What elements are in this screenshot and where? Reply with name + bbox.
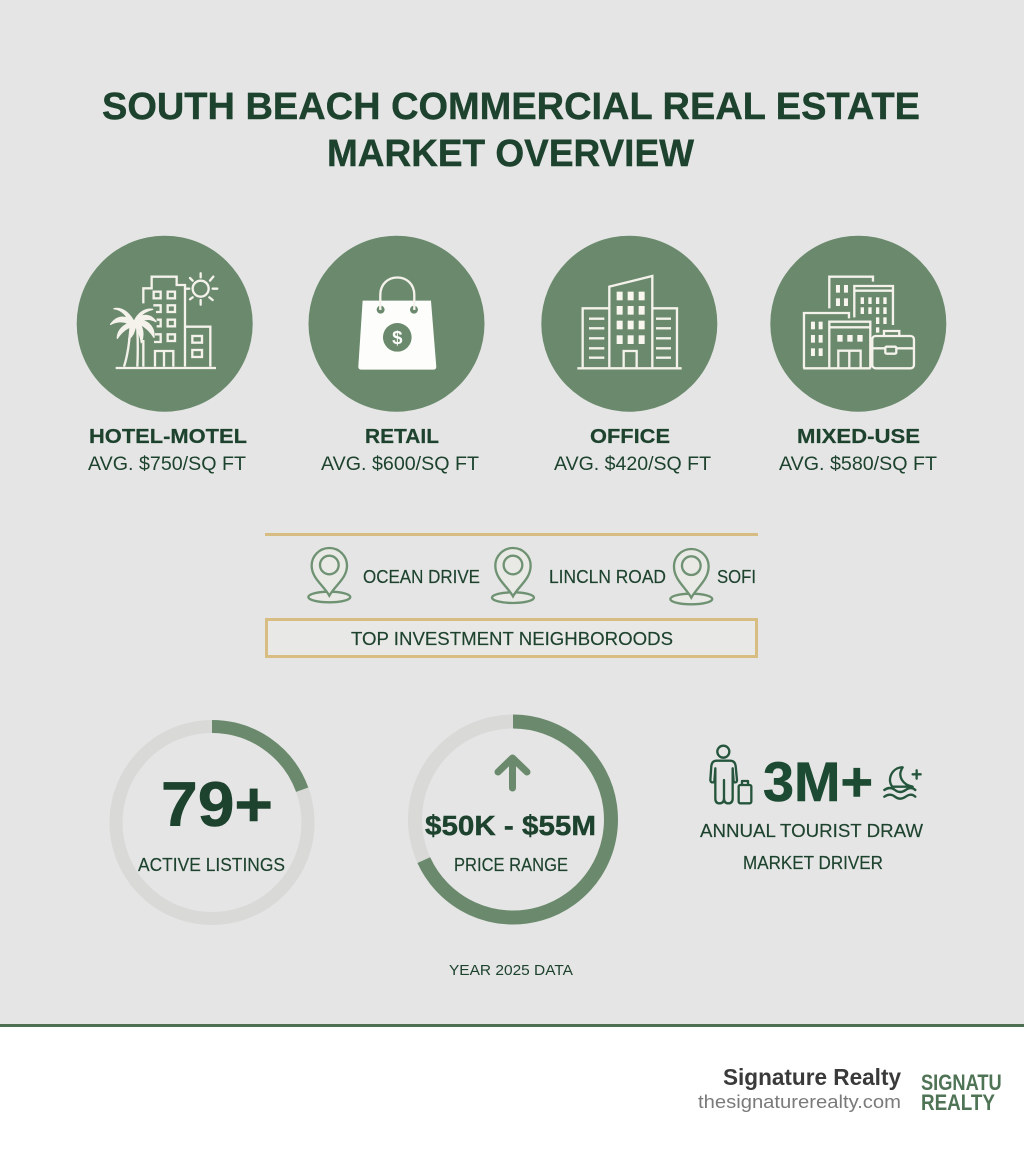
footer website: thesignaturerealty.com: [698, 1091, 901, 1112]
icon: lincoln road pin: [492, 548, 534, 603]
text: year 2025 data: YEAR 2025 DATA: [449, 963, 573, 979]
footer brand name: Signature Realty: [723, 1064, 901, 1090]
label: active listings: ACTIVE LISTINGS: [138, 855, 285, 875]
panel: price range: [415, 722, 611, 918]
panel: mixed-use: [770, 236, 946, 475]
label: mixed-use: MIXED-USE: [797, 425, 920, 448]
icon: tourist with suitcase: [710, 746, 751, 803]
label: office: OFFICE: [590, 425, 670, 448]
panel: retail: [308, 236, 484, 475]
arrow: up: [498, 758, 527, 788]
panel: active listings: [116, 726, 308, 918]
icon: hotel with palm and sun: [77, 236, 253, 412]
icon: shopping bag: $: [392, 327, 403, 348]
label: hotel price: AVG. $750/SQ FT: [88, 453, 246, 475]
label: hotel-motel: HOTEL-MOTEL: [89, 425, 247, 448]
logo: [922, 1074, 1001, 1110]
panel: tourist draw: [700, 746, 923, 873]
chart: listings ring: [116, 726, 308, 918]
label: annual tourist draw: ANNUAL TOURIST DRAW: [700, 821, 923, 841]
icon: mixed-use buildings with briefcase: [770, 236, 946, 412]
title: [102, 86, 920, 175]
number: 3M+: 3M+: [763, 750, 873, 813]
callout: top investment neighborhoods: TOP INVESTMENT NEIGHBOROODS: [351, 629, 673, 649]
label: lincoln road: LINCLN ROAD: [549, 567, 666, 587]
label: mixed-use price: AVG. $580/SQ FT: [779, 453, 937, 475]
icon: office towers: [541, 236, 717, 412]
label: office price: AVG. $420/SQ FT: [554, 453, 711, 475]
label: retail: RETAIL: [365, 425, 439, 448]
callout: top investment neighborhoods: [266, 620, 756, 656]
icon: sofi pin: [670, 549, 712, 604]
icon: shopping bag: [308, 236, 484, 412]
logo: REALTY: [921, 1090, 995, 1115]
chart: price ring: [415, 722, 611, 918]
icon: ocean drive pin: [308, 548, 350, 602]
label: ocean drive: OCEAN DRIVE: [363, 567, 480, 587]
label: retail price: AVG. $600/SQ FT: [321, 453, 479, 475]
icon: moon over waves: [884, 767, 921, 799]
title: SOUTH BEACH COMMERCIAL REAL ESTATE: [102, 86, 920, 128]
panel: office: [541, 236, 717, 475]
label: price range: PRICE RANGE: [454, 855, 568, 875]
panel: neighborhoods: [265, 533, 758, 656]
footer: [0, 1024, 1024, 1154]
number: 79+: 79+: [161, 770, 273, 840]
number: price range: $50K - $55M: [425, 810, 596, 841]
label: market driver: MARKET DRIVER: [743, 853, 883, 873]
panel: hotel-motel: [77, 236, 253, 475]
label: sofi: SOFI: [717, 567, 756, 587]
title: MARKET OVERVIEW: [327, 133, 694, 175]
